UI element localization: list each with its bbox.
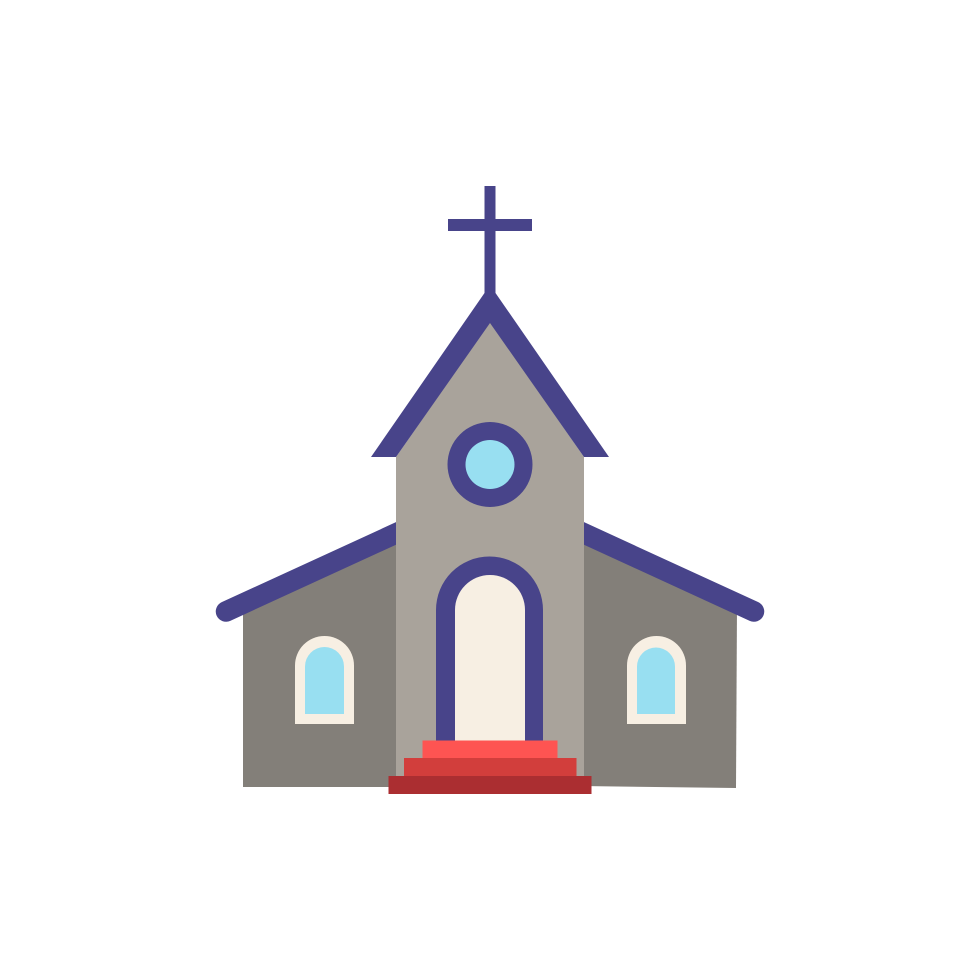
door — [436, 556, 543, 741]
tower wall — [396, 322, 584, 780]
left window — [295, 636, 354, 724]
right wing wall — [580, 535, 737, 788]
right window — [627, 636, 686, 724]
cross — [448, 186, 532, 296]
right wing roof — [570, 527, 754, 612]
left wing wall — [243, 535, 400, 787]
tower roof — [371, 293, 609, 457]
round window — [448, 422, 532, 507]
steps — [388, 740, 592, 794]
left wing roof — [226, 527, 410, 612]
